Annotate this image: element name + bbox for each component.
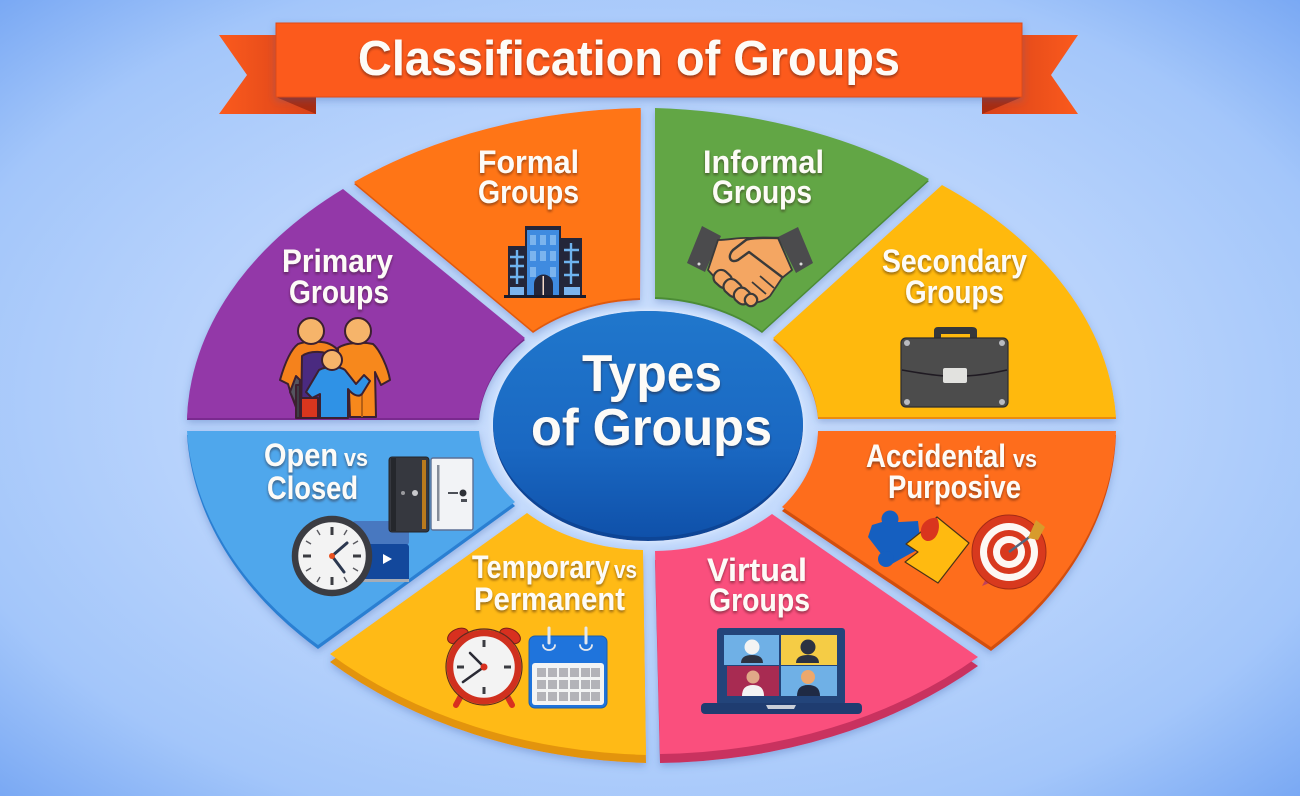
icon: handshake xyxy=(687,226,813,308)
label: accidental vs purposive: Accidental xyxy=(866,438,1006,474)
label: secondary groups xyxy=(882,243,1027,310)
panel: open vs closed xyxy=(187,431,515,649)
label: secondary groups: Groups xyxy=(905,274,1004,310)
title: Classification of Groups xyxy=(358,32,900,86)
label: open vs closed xyxy=(264,437,368,506)
label: formal groups: Groups xyxy=(478,174,579,210)
ribbon main band xyxy=(276,23,1022,97)
panel: secondary groups xyxy=(773,185,1116,419)
panel: accidental vs purposive xyxy=(782,431,1116,651)
hub label: of Groups xyxy=(531,399,772,457)
label: temporary vs permanent xyxy=(472,549,637,617)
yellow piece xyxy=(905,517,969,583)
label: informal groups: Groups xyxy=(712,174,812,210)
label: primary groups: Primary xyxy=(282,243,393,279)
ribbon folds xyxy=(276,97,1022,114)
hub label xyxy=(531,345,772,457)
hub ellipse xyxy=(493,311,803,537)
label: accidental vs purposive: vs xyxy=(1013,446,1037,473)
wall clock xyxy=(295,519,369,593)
label: accidental vs purposive: Purposive xyxy=(888,469,1021,505)
ribbon left tail xyxy=(219,35,316,114)
panel: temporary vs permanent xyxy=(330,513,646,763)
hub rim xyxy=(493,311,803,541)
panel: informal groups xyxy=(655,108,929,333)
label: open vs closed: Closed xyxy=(267,470,358,506)
screen box xyxy=(352,521,409,545)
label: primary groups: Groups xyxy=(289,274,389,310)
label: primary groups xyxy=(282,243,393,310)
icon: briefcase xyxy=(901,327,1008,407)
label: informal groups xyxy=(703,144,824,210)
icon: family xyxy=(280,318,390,418)
label: informal groups: Informal xyxy=(703,144,824,180)
blue piece xyxy=(868,510,921,567)
label: virtual groups: Virtual xyxy=(707,552,807,588)
icon: alarm clock xyxy=(445,625,523,705)
panel: formal groups xyxy=(354,108,641,333)
label: open vs closed: Open xyxy=(264,437,338,473)
label: temporary vs permanent: vs xyxy=(614,557,637,584)
open white door xyxy=(431,458,473,530)
label: formal groups xyxy=(478,144,579,210)
panel: primary groups xyxy=(187,189,525,420)
banner: title ribbon xyxy=(219,23,1078,114)
icon: office building xyxy=(504,226,586,298)
icon: laptop video call xyxy=(701,628,862,714)
label: secondary groups: Secondary xyxy=(882,243,1027,279)
icon: doors and clock xyxy=(295,457,473,593)
label: accidental vs purposive xyxy=(866,438,1037,505)
label: open vs closed: vs xyxy=(344,445,368,472)
label: virtual groups xyxy=(707,552,810,618)
closed dark door xyxy=(389,457,429,532)
red notch xyxy=(921,518,939,541)
label: temporary vs permanent: Permanent xyxy=(474,581,625,617)
icon: calendar xyxy=(529,628,607,708)
label: formal groups: Formal xyxy=(478,144,579,180)
hub label: Types xyxy=(582,345,722,403)
ribbon right tail xyxy=(982,35,1078,114)
label: temporary vs permanent: Temporary xyxy=(472,549,610,585)
panel: virtual groups xyxy=(655,514,978,763)
icon: puzzle pieces xyxy=(868,510,969,583)
label: virtual groups: Groups xyxy=(709,582,810,618)
center hub: types of groups xyxy=(493,311,803,541)
icon: target with arrow xyxy=(972,515,1046,589)
